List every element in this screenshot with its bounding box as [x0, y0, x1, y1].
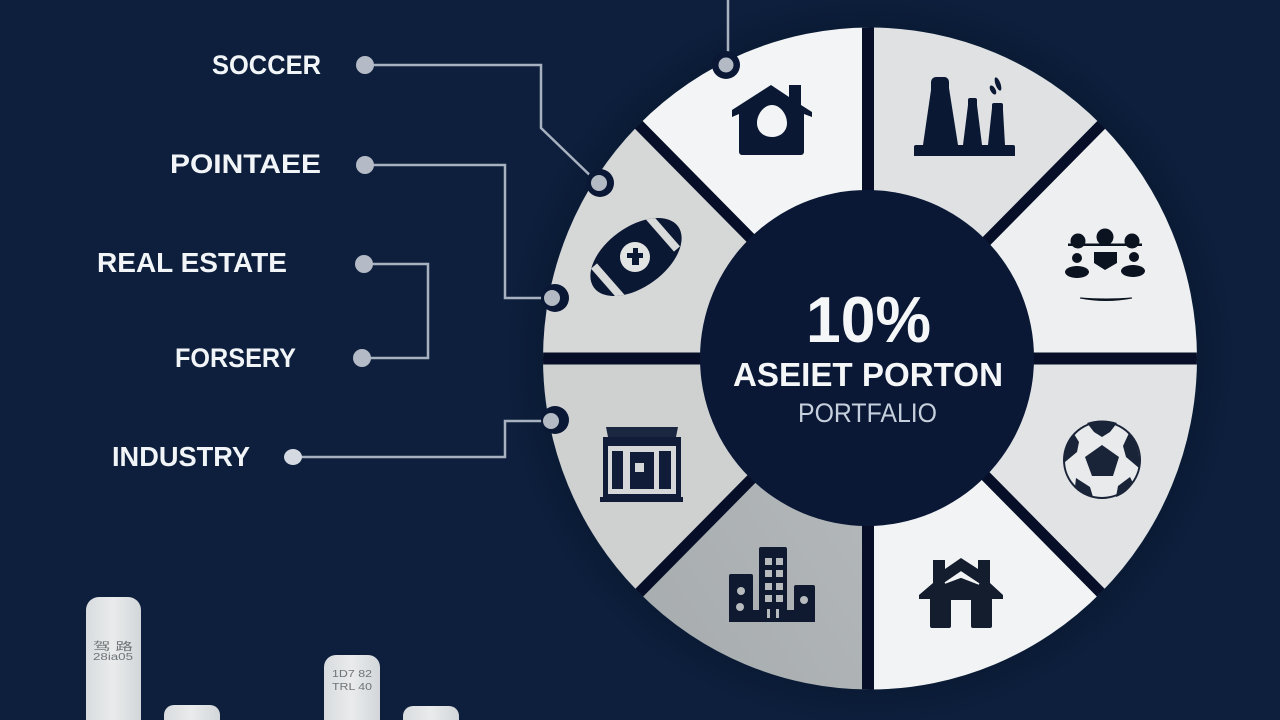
icon: city buildings: [729, 547, 815, 622]
segment: bottom right: [870, 358, 1101, 690]
segment: top right: [870, 28, 1101, 358]
center heading: ASEIET PORTON: [733, 356, 1003, 393]
bar 1: 28ia05: [93, 652, 134, 663]
label: industry: INDUSTRY: [112, 441, 250, 472]
bar 3: 1D7 82: [332, 669, 373, 680]
icon: people group: [1065, 228, 1145, 300]
segment: right upper: [870, 124, 1197, 358]
center percentage: 10%: [806, 283, 931, 356]
center subheading: PORTFALIO: [798, 398, 937, 428]
bar 4: [403, 706, 459, 720]
icon: stadium: [600, 427, 683, 502]
bar 1: 驾 路: [93, 640, 133, 653]
donut wheel: [536, 20, 1204, 696]
label: soccer: SOCCER: [212, 50, 321, 80]
bar 1: [86, 597, 141, 720]
segment: right lower: [870, 358, 1197, 592]
center circle: [700, 190, 1034, 526]
legend dots: [284, 56, 374, 465]
bar 3: [324, 655, 380, 720]
bar chart: [86, 597, 459, 720]
segment: top left: [639, 28, 870, 358]
bar 2: [164, 705, 220, 720]
icon: american football: [590, 218, 682, 296]
connector nodes on wheel: [541, 51, 740, 434]
segment: bottom left: [639, 358, 870, 690]
segment: left lower: [543, 358, 870, 592]
label: pointaee: POINTAEE: [170, 149, 321, 179]
connector lines: [293, 0, 728, 457]
icon: factory: [914, 77, 1015, 156]
segment: left upper: [543, 124, 870, 358]
icon: soccer ball: [1064, 420, 1140, 498]
bar 3: TRL 40: [332, 682, 373, 693]
label: real estate: REAL ESTATE: [97, 247, 287, 278]
label: forsery: FORSERY: [175, 343, 296, 373]
icon: house with chevron roof: [919, 558, 1003, 628]
icon: house with round window: [732, 85, 812, 155]
